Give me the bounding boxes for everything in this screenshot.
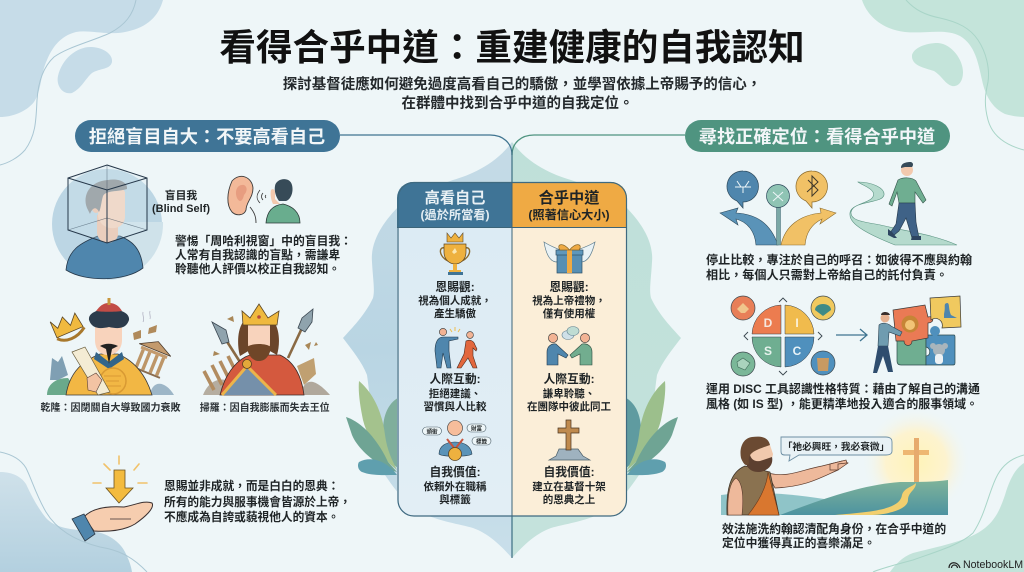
text: interaction, overestimate: 拒絕建議、 <box>429 387 481 400</box>
logo: NotebookLM: NotebookLM <box>963 559 1023 571</box>
text: self worth, overestimate: 依賴外在職稱 <box>424 480 487 493</box>
illustration: John the Baptist pointing to the cross: 「祂必興旺，我必衰微」 <box>783 440 889 453</box>
connector lines <box>340 135 685 558</box>
central leaf-shaped backdrop <box>343 142 681 558</box>
text: self worth, middle way: 建立在基督十架 <box>532 480 606 493</box>
label: blind self: (Blind Self) <box>152 203 210 215</box>
icon: person with medal and labels <box>422 420 491 460</box>
leaves right <box>626 381 678 475</box>
text: DISC tool: 風格 (如 IS 型) ，能更精準地投入適合的服事領域。 <box>706 396 978 411</box>
text: interaction, overestimate <box>424 372 487 413</box>
text: gift view, middle way: 僅有使用權 <box>543 307 596 320</box>
text: DISC tool: 運用 DISC 工具認識性格特質：藉由了解自己的溝通 <box>706 381 980 396</box>
text: interaction, middle way: 在團隊中彼此同工 <box>527 400 611 413</box>
icon: person with medal and labels: 標籤 <box>476 438 487 446</box>
corner decoration: bottom left <box>0 452 147 572</box>
illustration: John the Baptist pointing to the cross <box>721 407 971 517</box>
title: 看得合乎中道：重建健康的自我認知 <box>219 27 805 68</box>
text: stop comparing: 相比，每個人只需對上帝給自己的託付負責。 <box>706 267 948 282</box>
chart: DISC quadrant wheel: C <box>793 344 802 358</box>
text: John the Baptist: 定位中獲得真正的喜樂滿足。 <box>722 536 875 550</box>
heading pill: left: 拒絕盲目自大：不要高看自己 <box>89 126 325 147</box>
icon: walking along own path <box>850 162 957 245</box>
text: interaction, middle way <box>527 372 611 413</box>
text: interaction, overestimate: 習慣與人比較 <box>424 400 487 413</box>
text: stop comparing: 停止比較，專注於自己的呼召：如彼得不應與約翰 <box>706 252 972 267</box>
label: blind self <box>152 188 210 215</box>
heading pill: right: 尋找正確定位：看得合乎中道 <box>699 126 935 147</box>
text: grace <box>164 479 351 524</box>
text: Johari window warning: 聆聽他人評價以校正自我認知。 <box>175 262 340 276</box>
text: gift view, overestimate <box>418 280 492 320</box>
label: blind self: 盲目我 <box>165 188 197 202</box>
text: Johari window warning <box>175 234 352 276</box>
text: gift view, middle way: 恩賜觀: <box>549 280 589 294</box>
corner decoration: top left <box>0 0 163 165</box>
text: grace: 所有的能力與服事機會皆源於上帝， <box>164 495 351 509</box>
icon: crossroads with signposts <box>720 171 836 245</box>
leaves left <box>346 381 398 475</box>
subtitle <box>283 75 761 112</box>
text: grace: 不應成為自誇或藐視他人的資本。 <box>164 510 339 524</box>
text: self worth, middle way <box>532 465 606 506</box>
illustration: Qianlong emperor <box>47 298 174 395</box>
text: self worth, middle way: 的恩典之上 <box>543 493 596 506</box>
text: self worth, overestimate <box>424 465 487 506</box>
column heading: middle way: 合乎中道 <box>539 189 599 207</box>
chart: DISC quadrant wheel <box>731 296 835 376</box>
icon: cross on rock <box>549 420 590 460</box>
text: gift view, middle way <box>532 280 606 320</box>
icon: grace falling into open hand <box>72 456 153 541</box>
heading pill: right <box>685 120 950 152</box>
text: interaction, middle way: 人際互動: <box>543 372 595 386</box>
icon: ear listening to person <box>228 176 300 223</box>
text: Johari window warning: 警惕「周哈利視窗」中的盲目我： <box>175 234 352 248</box>
icon: person assembling puzzle <box>873 296 961 373</box>
corner decoration: bottom right <box>873 455 1024 572</box>
column heading: overestimate: 高看自己 <box>425 189 485 207</box>
subtitle: 探討基督徒應如何避免過度高看自己的驕傲，並學習依據上帝賜予的信心， <box>283 75 761 93</box>
text: self worth, overestimate: 與標籤 <box>439 493 471 506</box>
text: John the Baptist <box>722 522 946 550</box>
panel: comparison table <box>397 182 627 516</box>
icon: person with medal and labels: 財富 <box>471 424 482 432</box>
text: self worth, middle way: 自我價值: <box>543 465 595 479</box>
column heading: overestimate <box>420 189 490 222</box>
chart: DISC quadrant wheel: D <box>764 316 773 330</box>
text: John the Baptist: 效法施洗約翰認清配角身份，在合乎中道的 <box>722 522 946 536</box>
text: grace: 恩賜並非成就，而是白白的恩典： <box>164 479 339 493</box>
icon: blind self head in glass cube <box>52 165 163 280</box>
text: interaction, middle way: 謙卑聆聽、 <box>543 387 595 400</box>
text: interaction, overestimate: 人際互動: <box>429 372 481 386</box>
icon: person with medal and labels: 頭銜 <box>426 428 438 436</box>
text: gift view, overestimate: 恩賜觀: <box>435 280 475 294</box>
icon: pushing away figures <box>435 327 477 368</box>
chart: DISC quadrant wheel: S <box>764 344 772 358</box>
icon: winged gift box <box>544 242 595 273</box>
text: gift view, overestimate: 視為個人成就， <box>418 294 492 307</box>
column heading: middle way: (照著信心大小) <box>528 207 610 222</box>
column heading: middle way <box>528 189 610 222</box>
chart: DISC quadrant wheel: I <box>795 316 799 330</box>
text: Johari window warning: 人常有自我認識的盲點，需謙卑 <box>175 248 340 262</box>
text: gift view, overestimate: 產生驕傲 <box>434 307 476 320</box>
caption: Qianlong: 乾隆：因閉關自大導致國力衰敗 <box>40 401 180 414</box>
heading pill: left <box>75 120 340 152</box>
icon: handshake with speech bubbles <box>547 326 592 365</box>
corner decoration: top right <box>862 0 1024 150</box>
caption: Saul: 掃羅：因自我膨脹而失去王位 <box>200 401 330 414</box>
text: stop comparing <box>706 252 972 282</box>
arrow: DISC to puzzle <box>836 329 867 341</box>
illustration: King Saul <box>203 304 330 395</box>
subtitle: 在群體中找到合乎中道的自我定位。 <box>402 94 634 112</box>
icon: trophy <box>440 233 470 275</box>
text: DISC tool <box>706 381 980 411</box>
column heading: overestimate: (過於所當看) <box>420 207 490 222</box>
text: gift view, middle way: 視為上帝禮物， <box>532 294 606 307</box>
text: self worth, overestimate: 自我價值: <box>429 465 481 479</box>
